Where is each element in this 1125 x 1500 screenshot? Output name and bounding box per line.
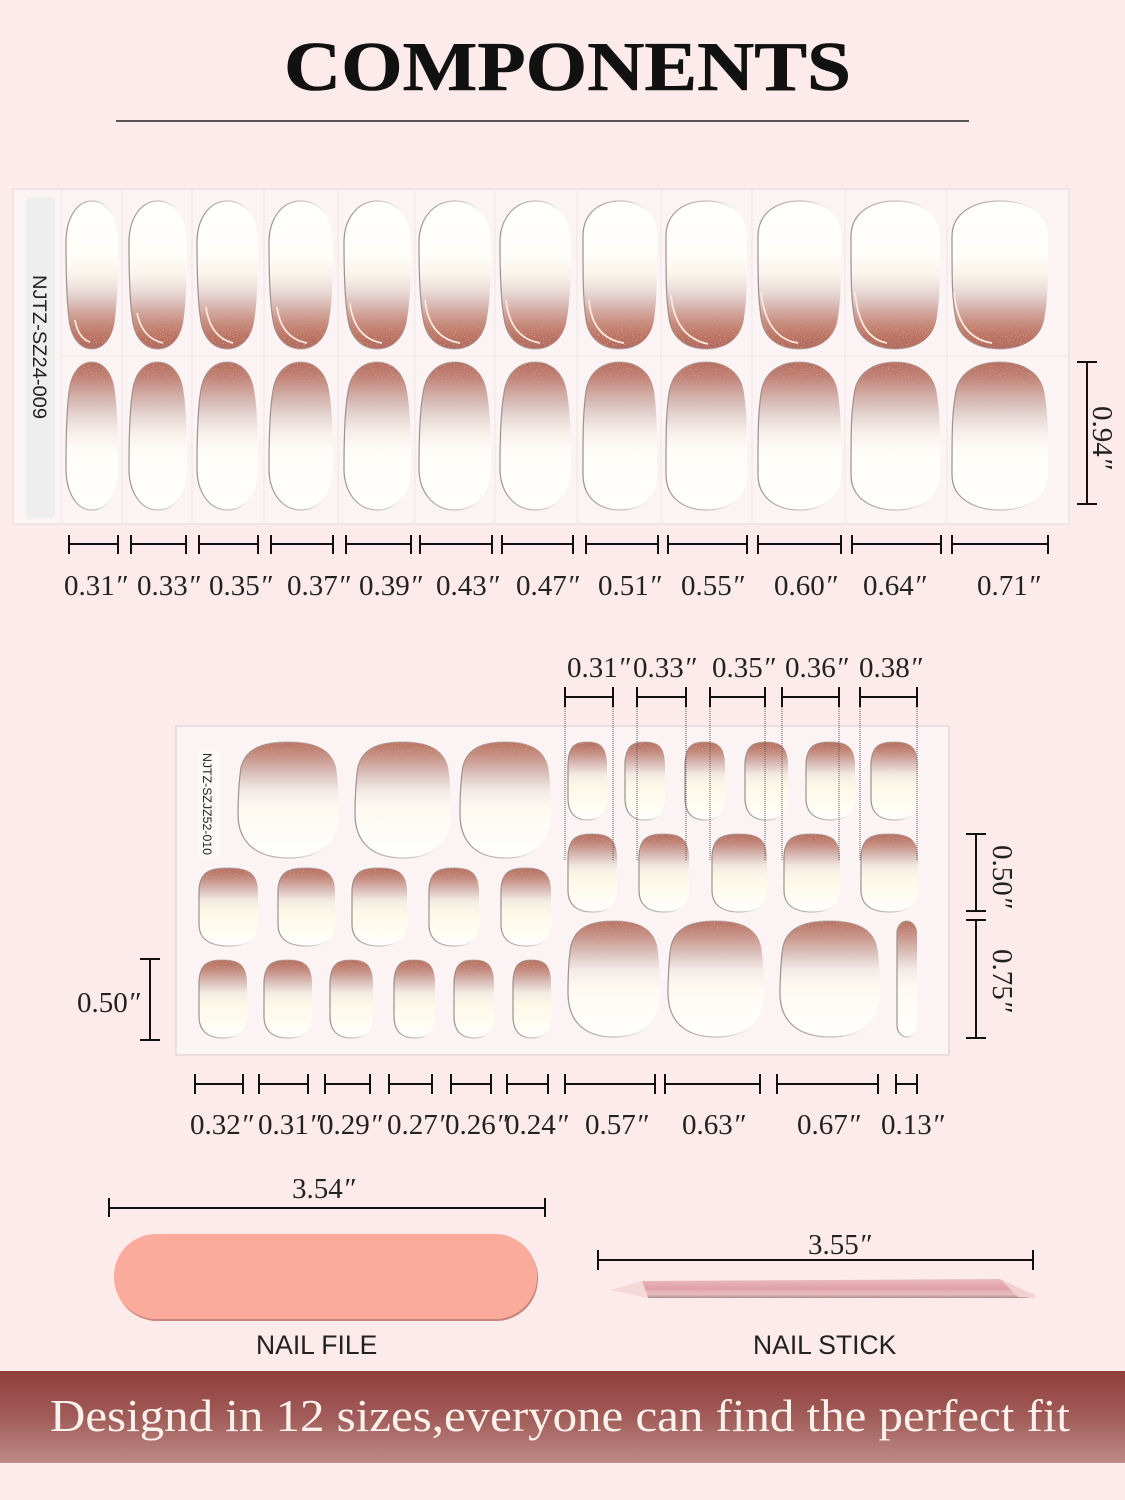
measurements: fingernail widths: 0.51″ (598, 570, 662, 602)
large toe nails, left (238, 742, 551, 858)
measurements: toe nail widths below sheet: 0.26″ (445, 1109, 509, 1141)
bottom row of nails (66, 362, 1048, 510)
measurements: toe nail widths below sheet: 0.13″ (881, 1109, 945, 1141)
measurements: fingernail widths: 0.39″ (359, 570, 423, 602)
bottom row of small nails (199, 960, 551, 1038)
measurements: fingernail widths: 0.64″ (863, 570, 927, 602)
measurements: fingernail widths: 0.60″ (774, 570, 838, 602)
measurements: fingernail widths: 0.71″ (977, 570, 1041, 602)
right upper row of nails (568, 742, 918, 820)
banner (0, 1371, 1125, 1463)
nail stick label: NAIL STICK (753, 1330, 897, 1360)
nail stick with measurement: 3.55″ (808, 1229, 872, 1261)
measurements: toe nail widths below sheet: 0.29″ (319, 1109, 383, 1141)
measurements: toe nail widths below sheet: 0.57″ (585, 1109, 649, 1141)
measurements: toe nail widths below sheet (190, 1074, 945, 1141)
measurements: fingernail widths: 0.35″ (209, 570, 273, 602)
measurements: fingernail widths (64, 535, 1048, 602)
sheet code label: NJTZ-SZJZ52-010 (200, 753, 212, 855)
measurements: small toe nail widths: 0.33″ (633, 652, 697, 684)
measurements: fingernail widths: 0.55″ (681, 570, 745, 602)
measurements: fingernail widths: 0.47″ (516, 570, 580, 602)
nail file with measurement: 3.54″ (292, 1173, 356, 1205)
nail stick with measurement (598, 1229, 1035, 1360)
measurement: toe nail height 0.50 right: 0.50 ″ (986, 845, 1018, 909)
measurements: toe nail widths below sheet: 0.31″ (258, 1109, 322, 1141)
measurements: fingernail widths: 0.31″ (64, 570, 128, 602)
sheet code label: NJTZ-SZ24-009 (28, 275, 50, 419)
measurements: fingernail widths: 0.43″ (436, 570, 500, 602)
measurement: sheet height 0.94 (1077, 362, 1118, 504)
right second row of nails (568, 834, 918, 912)
sheet code label (198, 750, 220, 858)
measurements: small toe nail widths: 0.38″ (859, 652, 923, 684)
sheet backing (13, 189, 1069, 524)
title: COMPONENTS (284, 29, 851, 106)
icon: nail file (114, 1234, 538, 1321)
middle row of small nails (199, 868, 551, 946)
large toe nails, right (568, 921, 917, 1037)
measurements: small toe nail widths: 0.35″ (712, 652, 776, 684)
panel: toe nail sheet (176, 707, 949, 1055)
measurement: sheet height 0.94: 0.94 ″ (1086, 406, 1118, 470)
nail file label: NAIL FILE (256, 1330, 377, 1360)
measurements: fingernail widths: 0.33″ (137, 570, 201, 602)
measurement: toe nail height 0.50 left (77, 959, 160, 1040)
measurements: toe nail widths below sheet: 0.32″ (190, 1109, 254, 1141)
measurement: toe nail height 0.50 left: 0.50″ (77, 987, 141, 1019)
measurements: toe nail widths below sheet: 0.24″ (505, 1109, 569, 1141)
measurement: toe nail height 0.50 right (966, 834, 1018, 911)
measurements: fingernail widths: 0.37″ (287, 570, 351, 602)
icon: nail stick (610, 1279, 1035, 1298)
banner slogan: Designd in 12 sizes,everyone can find the perfect fit (50, 1390, 1070, 1441)
measurements: toe nail widths below sheet: 0.27″ (387, 1109, 451, 1141)
sheet backing (176, 726, 949, 1055)
measurement: toe nail height 0.75 right: 0.75 ″ (986, 949, 1018, 1013)
measurements: small toe nail widths: 0.31″ (567, 652, 631, 684)
measurement: toe nail height 0.75 right (966, 920, 1018, 1038)
panel: press-on nail sheet (12 sizes) (13, 189, 1069, 524)
measurements: toe nail widths below sheet: 0.67″ (797, 1109, 861, 1141)
measurements: small toe nail widths (565, 652, 923, 707)
sheet code label (26, 197, 55, 518)
measurements: small toe nail widths: 0.36″ (785, 652, 849, 684)
measurements: toe nail widths below sheet: 0.63″ (682, 1109, 746, 1141)
top row of nails (66, 201, 1048, 349)
nail file with measurement (109, 1173, 545, 1360)
